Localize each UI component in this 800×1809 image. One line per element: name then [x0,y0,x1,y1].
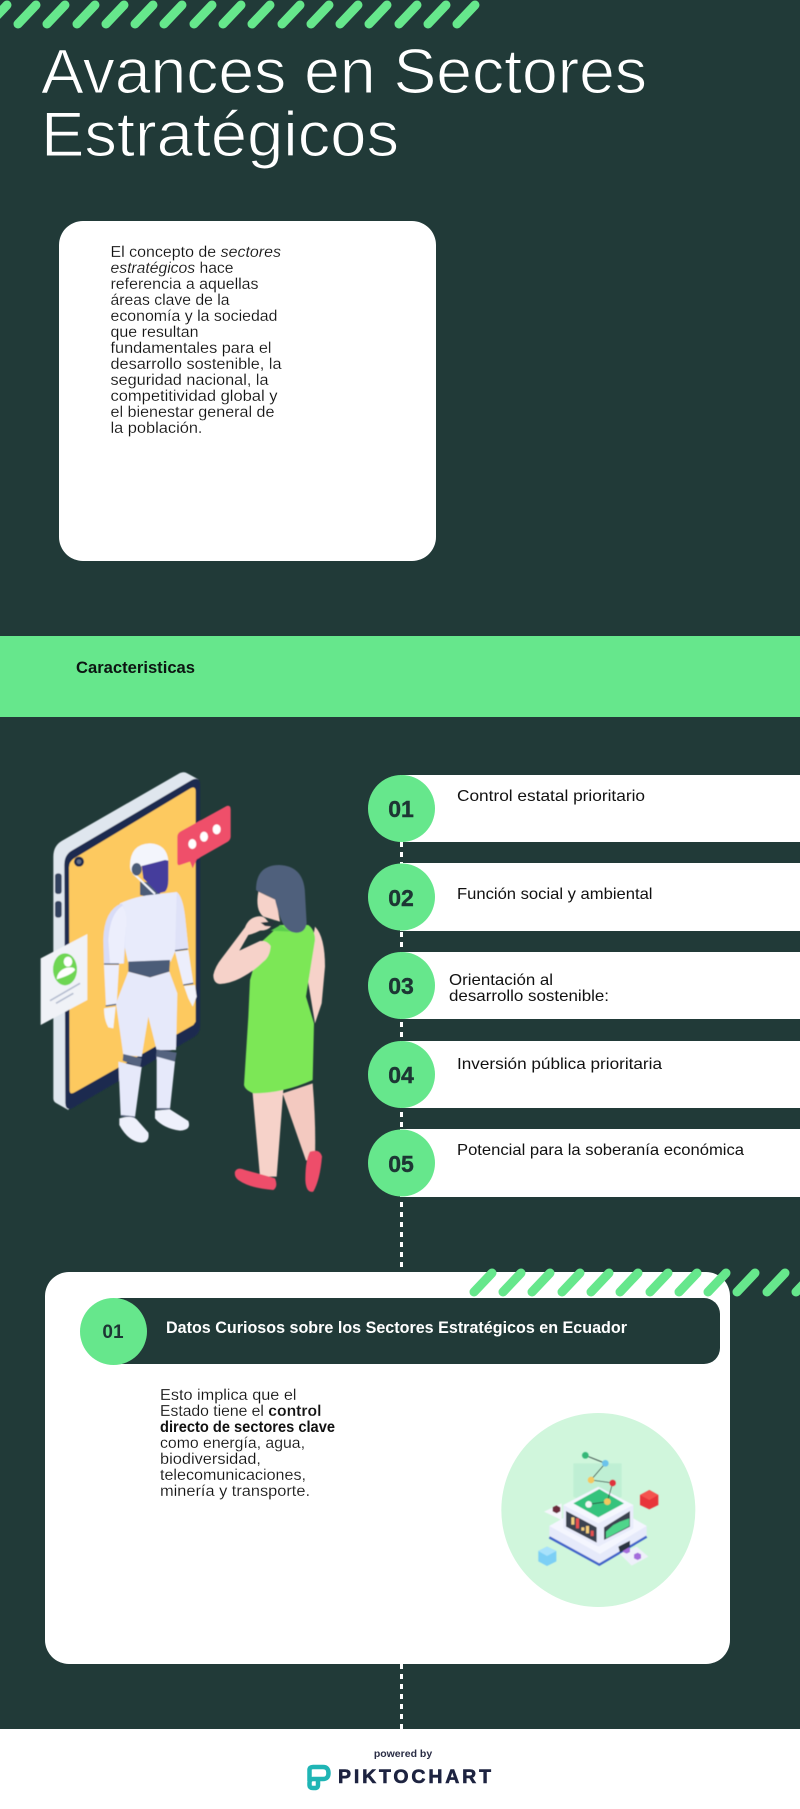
list item 03: desarrollo sostenible: [449,988,609,1005]
woman [213,865,325,1192]
list item 04: 04 [388,1062,414,1088]
intro text block: seguridad nacional, la [110,372,269,389]
footer: PIKTOCHART [338,1766,491,1788]
card header bar [80,1298,720,1365]
top stripes decoration [0,5,475,24]
section banner: Caracteristicas [0,636,800,717]
card text block: minería y transporte. [160,1483,310,1500]
title [41,37,647,170]
card text block: telecomunicaciones, [160,1467,306,1484]
profile card [41,934,87,1025]
list item 02: 02 [388,885,414,911]
intro text block: estratégicos hace [110,260,234,277]
card header bar: Datos Curiosos sobre los Sectores Estratégicos en Ecuador [166,1319,628,1337]
intro text block [110,244,282,437]
icon: data server in circle [501,1413,695,1607]
footer [0,1729,800,1809]
list item 01 [368,775,800,842]
card text block [160,1387,335,1500]
intro text block: áreas clave de la [110,292,230,309]
footer: powered by [374,1748,432,1760]
icon: piktochart logo [310,1767,328,1788]
card text block: directo de sectores clave [160,1419,335,1436]
panel: datos curiosos card [45,1272,800,1664]
intro text block: desarrollo sostenible, la [110,356,282,373]
card text block: Estado tiene el control [160,1403,322,1420]
robot [103,843,197,1143]
list item 05: Potencial para la soberanía económica [457,1142,744,1159]
list item 03: Orientación al [449,972,553,989]
list item 05: 05 [388,1151,414,1177]
list item 03 [368,952,800,1019]
list item 02: Función social y ambiental [457,886,652,903]
tablet [53,772,200,1110]
intro text block: que resultan [110,324,198,341]
card text block: Esto implica que el [160,1387,296,1404]
speech bubble [177,806,231,868]
intro text block: competitividad global y [110,388,278,405]
dotted connector line [400,842,403,1272]
title: Avances en Sectores [41,37,647,107]
card header bar: 01 [102,1322,124,1343]
illustration: robot and woman with tablet [41,772,325,1192]
list item 05 [368,1129,800,1197]
list item 04 [368,1041,800,1108]
intro text block: el bienestar general de [110,404,274,421]
intro text block: la población. [110,420,202,437]
intro text block: El concepto de sectores [110,244,281,261]
list item 01: Control estatal prioritario [457,788,645,805]
dotted connector line lower [400,1664,403,1729]
intro text block: economía y la sociedad [110,308,278,325]
panel: intro card [59,221,436,561]
card text block: biodiversidad, [160,1451,261,1468]
list item 04: Inversión pública prioritaria [457,1056,662,1073]
intro text block: fundamentales para el [110,340,272,357]
card text block: como energía, agua, [160,1435,305,1452]
list item 02 [368,863,800,931]
card stripes decoration [474,1273,800,1292]
list item 01: 01 [388,796,414,822]
list item 03: 03 [388,973,414,999]
section banner: Caracteristicas: Caracteristicas [76,659,195,677]
intro text block: referencia a aquellas [110,276,259,293]
title: Estratégicos [41,100,399,170]
